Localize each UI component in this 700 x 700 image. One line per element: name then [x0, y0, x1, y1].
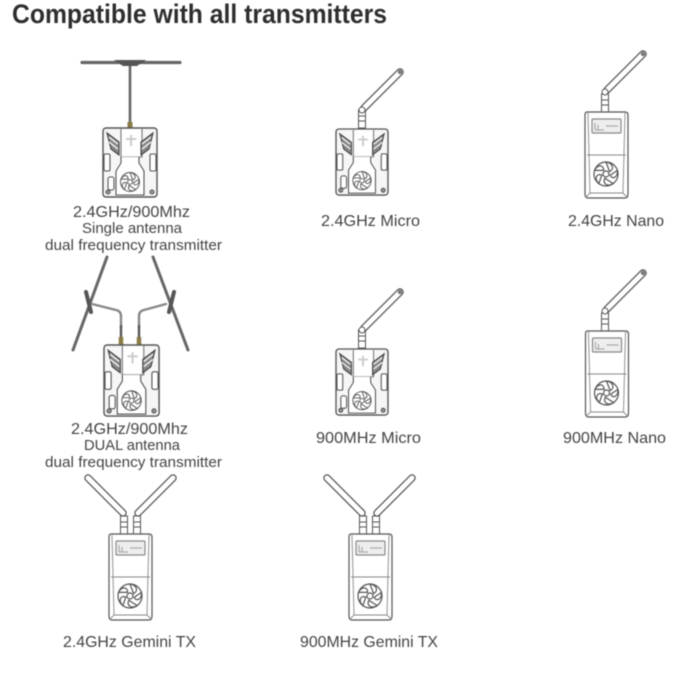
device: 2.4GHz/900Mhz single antenna [45, 60, 222, 254]
label: 2.4GHz Nano: 2.4GHz Nano [568, 213, 664, 230]
label: 2.4GHz Micro: 2.4GHz Micro [321, 213, 420, 230]
icon: twin rod antennas [327, 478, 412, 534]
device: 900MHz Micro [316, 290, 421, 447]
icon: twin rod antennas [88, 478, 173, 534]
icon: rod antenna [602, 271, 645, 331]
icon: gemini body [349, 534, 392, 620]
label: single antenna: dual frequency transmitter [45, 237, 222, 254]
icon: dual antenna transmitter body [104, 345, 159, 416]
icon: T antenna [82, 60, 180, 129]
label: dual antenna: dual frequency transmitter [45, 454, 222, 471]
icon: rod antenna [358, 290, 402, 348]
icon: dual T antennas [73, 257, 188, 350]
icon: rod antenna [602, 52, 645, 112]
icon: gemini body [109, 534, 152, 620]
icon: nano body [585, 112, 628, 198]
label: single antenna: 2.4GHz/900Mhz [73, 204, 190, 221]
icon: micro body [336, 349, 388, 415]
label: dual antenna: DUAL antenna [84, 437, 181, 454]
icon: micro body [336, 129, 388, 195]
icon: nano body [586, 331, 628, 417]
label: 900MHz Gemini TX: 900MHz Gemini TX [300, 634, 438, 651]
device: 2.4GHz Nano [568, 52, 664, 230]
icon: single antenna transmitter body [103, 128, 157, 197]
label: single antenna [45, 204, 222, 254]
device: 900MHz Gemini TX [300, 478, 438, 651]
device: 900MHz Nano [563, 271, 666, 447]
device: 2.4GHz Gemini TX [63, 478, 196, 651]
label: single antenna: Single antenna [82, 220, 183, 237]
label: 900MHz Micro: 900MHz Micro [316, 430, 421, 447]
label: 2.4GHz Gemini TX: 2.4GHz Gemini TX [63, 634, 196, 651]
icon: rod antenna [358, 70, 402, 128]
label: dual antenna [45, 421, 222, 471]
label: dual antenna: 2.4GHz/900Mhz [71, 421, 188, 438]
label: 900MHz Nano: 900MHz Nano [563, 430, 666, 447]
device: 2.4GHz Micro [321, 70, 420, 230]
device: 2.4GHz/900Mhz dual antenna [45, 257, 222, 471]
